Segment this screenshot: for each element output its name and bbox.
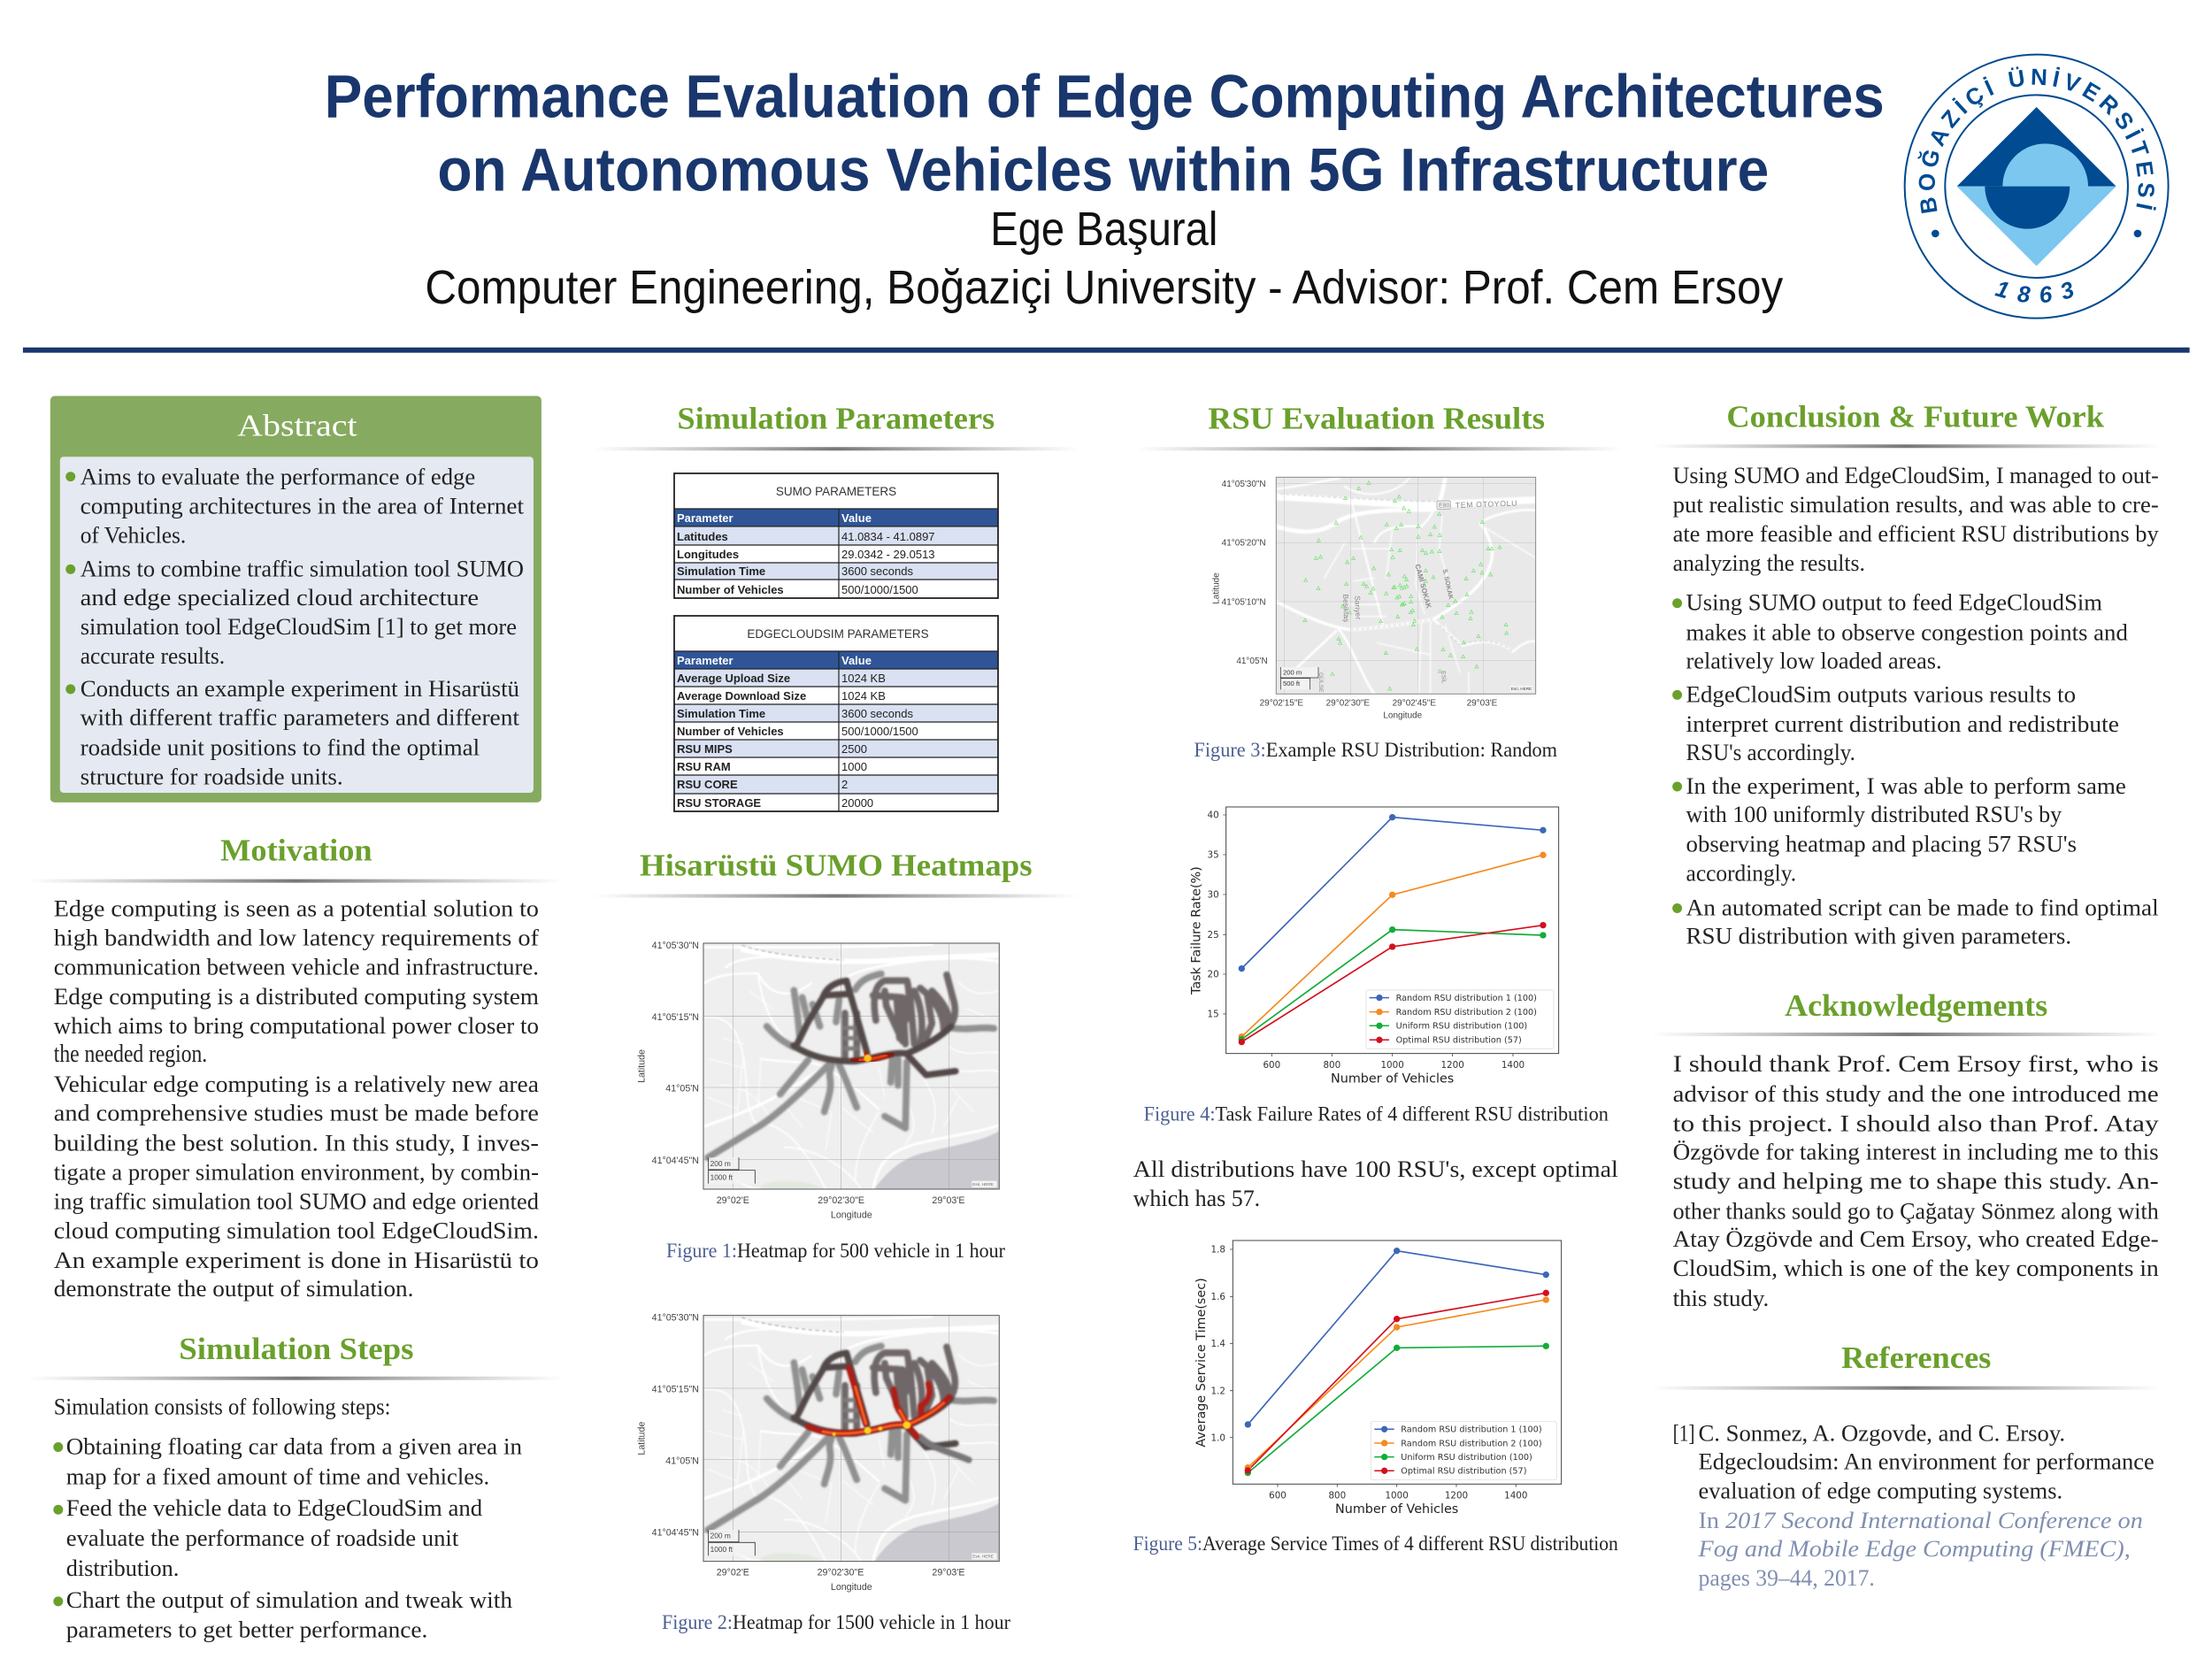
chart: heatmap 500 vehicles: Longitude — [831, 1210, 872, 1220]
motivation text: high bandwidth and low latency requirements of — [54, 924, 539, 950]
chart: task failure rate: Uniform RSU distribution (100) — [1396, 1022, 1527, 1032]
chart: rsu distribution map: 29°02'45"E — [1393, 698, 1436, 708]
chart: rsu distribution map: 5. SOKAK — [1441, 569, 1455, 601]
abstract bullets: of Vehicles. — [81, 521, 186, 548]
table: sumo parameters: 3600 seconds — [841, 565, 913, 578]
conclusion text: analyzing the results. — [1673, 549, 1865, 576]
reference entry: Edgecloudsim: An environment for performance — [1699, 1448, 2154, 1474]
chart: rsu distribution map: 29°03'E — [1467, 698, 1498, 708]
heading: heatmaps: Hisarüstü SUMO Heatmaps — [640, 849, 1033, 883]
table: sumo parameters: Number of Vehicles — [677, 583, 784, 596]
table: edgecloudsim parameters: 2 — [841, 778, 848, 791]
table: edgecloudsim parameters: Number of Vehicles — [677, 725, 784, 738]
conclusion bullets: accordingly. — [1686, 860, 1796, 887]
chart: heatmap 1500 vehicles — [637, 1313, 999, 1593]
chart: average service time: 1.4 — [1211, 1339, 1225, 1349]
chart: heatmap 500 vehicles: Latitude — [637, 1049, 648, 1083]
icon: university logo: BOĞAZİÇİ ÜNİVERSİTESİ — [1917, 66, 2156, 214]
motivation text: communication between vehicle and infrastructure. — [54, 953, 539, 979]
table: edgecloudsim parameters: 1000 — [841, 760, 867, 773]
panel: conclusion and future work — [1651, 399, 2162, 949]
conclusion bullets: Using SUMO output to feed EdgeCloudSim — [1686, 589, 2102, 616]
chart: rsu distribution map: Latitude — [1211, 572, 1221, 604]
table: sumo parameters: Value — [841, 511, 872, 525]
chart: average service time: Random RSU distribution 2 (100) — [1401, 1439, 1542, 1448]
chart: task failure rate: 1200 — [1440, 1060, 1464, 1071]
chart: rsu distribution map: TEM OTOYOLU — [1455, 499, 1517, 510]
acknowledgements text: other thanks sould go to Çağatay Sönmez along with — [1673, 1197, 2159, 1224]
panel: motivation — [27, 833, 565, 1302]
conclusion text: put realistic simulation results, and was able to cre- — [1673, 491, 2159, 518]
chart: task failure rate: 20 — [1208, 970, 1219, 980]
motivation text: demonstrate the output of simulation. — [54, 1275, 413, 1302]
conclusion bullets: interpret current distribution and redistribute — [1686, 710, 2119, 737]
chart: task failure rate: 40 — [1208, 810, 1219, 821]
simulation steps text: Chart the output of simulation and tweak with — [66, 1586, 513, 1613]
chart: average service time: Random RSU distribution 1 (100) — [1401, 1425, 1542, 1435]
chart: task failure rate: 15 — [1208, 1010, 1219, 1020]
chart: rsu distribution map: CAMİ SOKAK — [1413, 564, 1432, 610]
chart: heatmap 1500 vehicles: 41°05'30"N — [652, 1313, 699, 1324]
chart: average service time — [1194, 1240, 1562, 1517]
abstract bullets: accurate results. — [81, 642, 225, 669]
motivation text: ing traffic simulation tool SUMO and edge oriented — [54, 1187, 539, 1214]
heading: references: References — [1841, 1340, 1991, 1375]
chart: rsu distribution map — [1211, 477, 1536, 720]
table: edgecloudsim parameters: RSU RAM — [677, 760, 731, 773]
conclusion bullets: with 100 uniformly distributed RSU's by — [1686, 801, 2062, 827]
motivation text: tigate a proper simulation environment, by combin- — [54, 1158, 539, 1185]
acknowledgements text: study and helping me to shape this study. An- — [1673, 1167, 2159, 1194]
chart: average service time: Number of Vehicles — [1335, 1502, 1458, 1517]
caption: figure 2: Figure 2:Heatmap for 1500 vehicle in 1 hour — [662, 1611, 1010, 1633]
title: Performance Evaluation of Edge Computing Architectures — [325, 63, 1885, 131]
abstract bullets: computing architectures in the area of Internet — [81, 493, 525, 519]
chart: task failure rate: 30 — [1208, 890, 1219, 901]
simulation steps text: parameters to get better performance. — [66, 1617, 427, 1643]
chart: task failure rate: Optimal RSU distribution (57) — [1396, 1036, 1522, 1046]
conclusion bullets: makes it able to observe congestion points and — [1686, 619, 2128, 646]
reference entry: C. Sonmez, A. Ozgovde, and C. Ersoy. — [1699, 1419, 2065, 1446]
chart: heatmap 1500 vehicles: 1000 ft — [710, 1545, 733, 1554]
chart: heatmap 1500 vehicles: 29°03'E — [932, 1568, 965, 1578]
chart: task failure rate: 1400 — [1502, 1060, 1525, 1071]
table: sumo parameters: Simulation Time — [677, 565, 765, 578]
chart: average service time: Average Service Time(sec) — [1194, 1278, 1209, 1448]
table: sumo parameters: Longitudes — [677, 548, 739, 561]
caption: figure 1: Figure 1:Heatmap for 500 vehicle in 1 hour — [666, 1240, 1005, 1262]
motivation text: Vehicular edge computing is a relatively new area — [54, 1071, 539, 1097]
acknowledgements text: Özgövde for taking interest in including me to this — [1673, 1139, 2159, 1165]
abstract bullets: simulation tool EdgeCloudSim [1] to get more — [81, 613, 517, 640]
conclusion text: Using SUMO and EdgeCloudSim, I managed to out- — [1673, 462, 2159, 488]
chart: rsu distribution map: 41°05'30"N — [1222, 480, 1266, 489]
heading: motivation: Motivation — [220, 833, 373, 868]
chart: heatmap 500 vehicles: 29°02'E — [717, 1195, 749, 1206]
caption: figure 5: Figure 5:Average Service Times of 4 different RSU distribution — [1133, 1532, 1618, 1555]
chart: heatmap 500 vehicles: 1000 ft — [710, 1172, 733, 1181]
chart: heatmap 1500 vehicles: 41°05'15"N — [652, 1385, 699, 1395]
motivation text: An example experiment is done in Hisarüstü to — [54, 1247, 539, 1273]
reference entry — [1673, 1419, 2154, 1591]
abstract bullets: roadside unit positions to find the optimal — [81, 734, 480, 761]
abstract bullets: Aims to combine traffic simulation tool SUMO — [81, 555, 524, 581]
chart: rsu distribution map: Longitude — [1383, 710, 1423, 720]
panel: simulation parameters — [593, 401, 1079, 811]
table: sumo parameters: SUMO PARAMETERS — [776, 485, 896, 498]
chart: heatmap 1500 vehicles: Longitude — [831, 1582, 872, 1593]
chart: heatmap 1500 vehicles: 29°02'30"E — [818, 1568, 864, 1578]
chart: heatmap 500 vehicles: 41°05'N — [665, 1084, 699, 1094]
motivation text: Edge computing is seen as a potential solution to — [54, 895, 539, 921]
table: edgecloudsim parameters: 1024 KB — [841, 672, 886, 685]
heading: simulation parameters: Simulation Parameters — [677, 401, 995, 435]
panel: abstract — [50, 396, 541, 803]
header rule — [23, 348, 2190, 353]
acknowledgements text — [1673, 1050, 2159, 1311]
chart: average service time: 1.2 — [1211, 1386, 1225, 1396]
title — [325, 63, 1885, 204]
caption: figure 3: Figure 3:Example RSU Distribution: Random — [1194, 739, 1557, 761]
panel: rsu evaluation results — [1133, 401, 1623, 1555]
heading: acknowledgements: Acknowledgements — [1785, 988, 2047, 1023]
chart: heatmap 500 vehicles: Esri, HERE — [972, 1182, 994, 1187]
heading: rsu evaluation results: RSU Evaluation Results — [1208, 401, 1545, 435]
chart: heatmap 1500 vehicles: 41°05'N — [665, 1455, 699, 1466]
chart: average service time: 800 — [1328, 1490, 1346, 1501]
conclusion bullets — [1672, 589, 2159, 949]
conclusion text — [1673, 462, 2159, 576]
acknowledgements text: I should thank Prof. Cem Ersoy first, who is — [1673, 1050, 2159, 1077]
heading: conclusion: Conclusion & Future Work — [1726, 399, 2105, 434]
table: edgecloudsim parameters: Parameter — [677, 654, 733, 667]
chart: heatmap 500 vehicles: 29°02'30"E — [818, 1195, 864, 1206]
table: sumo parameters — [674, 473, 998, 598]
motivation text: cloud computing simulation tool EdgeCloudSim. — [54, 1217, 539, 1243]
chart: rsu distribution map: E80 — [1439, 503, 1450, 509]
simulation steps text: Simulation consists of following steps: — [54, 1394, 391, 1420]
table: edgecloudsim parameters: Simulation Time — [677, 707, 765, 720]
chart: average service time: 1.8 — [1211, 1245, 1225, 1256]
conclusion bullets: observing heatmap and placing 57 RSU's — [1686, 831, 2077, 857]
table: edgecloudsim parameters: RSU MIPS — [677, 742, 733, 756]
reference entry: pages 39–44, 2017. — [1699, 1564, 1875, 1591]
chart: task failure rate: 800 — [1323, 1060, 1340, 1071]
chart: task failure rate: Random RSU distribution 2 (100) — [1396, 1008, 1537, 1018]
abstract bullets: with different traffic parameters and different — [81, 704, 520, 731]
chart: task failure rate: 35 — [1208, 850, 1219, 861]
reference entry: Fog and Mobile Edge Computing (FMEC), — [1697, 1535, 2131, 1562]
panel: heatmaps — [593, 849, 1079, 1633]
table: sumo parameters: Parameter — [677, 511, 733, 525]
table: edgecloudsim parameters: 20000 — [841, 796, 873, 810]
chart: average service time: 600 — [1269, 1490, 1286, 1501]
chart: task failure rate: 25 — [1208, 930, 1219, 941]
motivation text: building the best solution. In this study, I inves- — [54, 1130, 539, 1156]
note: distributions: All distributions have 100 RSU's, except optimal — [1133, 1156, 1618, 1182]
panel: simulation steps — [27, 1332, 565, 1643]
conclusion bullets: RSU's accordingly. — [1686, 739, 1855, 765]
table: edgecloudsim parameters: RSU STORAGE — [677, 796, 761, 810]
heading: simulation steps: Simulation Steps — [179, 1332, 413, 1366]
abstract bullets — [65, 464, 525, 790]
acknowledgements text: Atay Özgövde and Cem Ersoy, who created Edge- — [1673, 1225, 2159, 1252]
chart: heatmap 1500 vehicles: Esri, HERE — [972, 1555, 994, 1559]
chart: rsu distribution map: GÜLSE — [1317, 672, 1325, 693]
author: Ege Başural — [990, 203, 1217, 256]
note: distributions: which has 57. — [1133, 1185, 1260, 1211]
motivation text: and comprehensive studies must be made before — [54, 1100, 539, 1126]
table: edgecloudsim parameters: 2500 — [841, 742, 867, 756]
conclusion bullets: RSU distribution with given parameters. — [1686, 922, 2071, 949]
acknowledgements text: CloudSim, which is one of the key components in — [1673, 1255, 2159, 1281]
panel: acknowledgements — [1651, 988, 2162, 1311]
chart: rsu distribution map: 41°05'20"N — [1222, 539, 1266, 549]
chart: task failure rate: Task Failure Rate(%) — [1190, 866, 1204, 995]
chart: heatmap 1500 vehicles: 29°02'E — [717, 1568, 749, 1578]
chart: rsu distribution map: 41°05'10"N — [1222, 597, 1266, 607]
table: edgecloudsim parameters: EDGECLOUDSIM PARAMETERS — [747, 627, 929, 641]
table: edgecloudsim parameters: RSU CORE — [677, 778, 738, 791]
table: sumo parameters: Latitudes — [677, 530, 728, 543]
abstract bullets: Aims to evaluate the performance of edge — [81, 464, 475, 490]
chart: heatmap 500 vehicles: 200 m — [710, 1159, 731, 1168]
chart: average service time: 1.0 — [1211, 1432, 1225, 1443]
chart: average service time: 1400 — [1504, 1490, 1527, 1501]
chart: heatmap 500 vehicles — [637, 941, 999, 1220]
conclusion bullets: An automated script can be made to find optimal — [1686, 895, 2159, 921]
chart: task failure rate: Random RSU distribution 1 (100) — [1396, 994, 1537, 1003]
chart: rsu distribution map: ESİL — [1440, 671, 1448, 684]
chart: rsu distribution map: Sarıyer — [1353, 595, 1363, 619]
title: on Autonomous Vehicles within 5G Infrastructure — [437, 135, 1769, 204]
table: sumo parameters: 500/1000/1500 — [841, 583, 918, 596]
caption: figure 4: Figure 4:Task Failure Rates of 4 different RSU distribution — [1144, 1103, 1609, 1125]
icon: university logo — [1904, 53, 2170, 319]
chart: heatmap 1500 vehicles: Latitude — [637, 1422, 648, 1455]
table: edgecloudsim parameters: 3600 seconds — [841, 707, 913, 720]
simulation steps text — [53, 1394, 523, 1643]
chart: rsu distribution map: Esri, HERE — [1511, 687, 1532, 691]
simulation steps text: Feed the vehicle data to EdgeCloudSim and — [66, 1494, 483, 1521]
reference entry: evaluation of edge computing systems. — [1699, 1477, 2062, 1503]
abstract bullets: Conducts an example experiment in Hisarüstü — [81, 675, 519, 702]
table: edgecloudsim parameters: 1024 KB — [841, 689, 886, 703]
acknowledgements text: this study. — [1673, 1285, 1769, 1311]
chart: heatmap 500 vehicles: 41°05'15"N — [652, 1012, 699, 1023]
motivation text: Edge computing is a distributed computing system — [54, 983, 539, 1010]
icon: university logo: 1863 — [1994, 281, 2074, 303]
reference entry: In 2017 Second International Conference on — [1699, 1507, 2143, 1533]
panel: references — [1651, 1340, 2162, 1591]
table: edgecloudsim parameters: 500/1000/1500 — [841, 725, 918, 738]
chart: average service time: 1000 — [1385, 1490, 1409, 1501]
chart: average service time: 1.6 — [1211, 1292, 1225, 1302]
chart: rsu distribution map: 41°05'N — [1236, 657, 1268, 666]
simulation steps text: distribution. — [66, 1555, 179, 1581]
table: sumo parameters: 41.0834 - 41.0897 — [841, 530, 935, 543]
motivation text: which aims to bring computational power closer to — [54, 1012, 539, 1039]
chart: task failure rate: Number of Vehicles — [1331, 1071, 1454, 1086]
table: edgecloudsim parameters: Value — [841, 654, 872, 667]
chart: heatmap 500 vehicles: 41°04'45"N — [652, 1156, 699, 1166]
conclusion text: ate more feasible and efficient RSU distributions by — [1673, 520, 2159, 547]
chart: rsu distribution map: 500 ft — [1283, 680, 1301, 687]
conclusion bullets: EdgeCloudSim outputs various results to — [1686, 680, 2076, 707]
acknowledgements text: to this project. I should also than Prof. Atay — [1673, 1110, 2159, 1137]
chart: average service time: 1200 — [1445, 1490, 1468, 1501]
simulation steps text: evaluate the performance of roadside unit — [66, 1525, 459, 1551]
table: sumo parameters: 29.0342 - 29.0513 — [841, 548, 935, 561]
table: edgecloudsim parameters: Average Download Size — [677, 689, 806, 703]
chart: task failure rate: 1000 — [1380, 1060, 1404, 1071]
chart: average service time: Optimal RSU distribution (57) — [1401, 1467, 1526, 1477]
reference entry: [1] — [1673, 1419, 1695, 1446]
chart: heatmap 500 vehicles: 41°05'30"N — [652, 941, 699, 951]
chart: rsu distribution map: 200 m — [1283, 669, 1302, 677]
simulation steps text: Obtaining floating car data from a given area in — [66, 1432, 523, 1459]
acknowledgements text: advisor of this study and the one introduced me — [1673, 1080, 2159, 1107]
chart: rsu distribution map: 29°02'15"E — [1260, 698, 1303, 708]
table: edgecloudsim parameters: Average Upload Size — [677, 672, 790, 685]
abstract bullets: and edge specialized cloud architecture — [81, 584, 479, 611]
chart: rsu distribution map: 29°02'30"E — [1326, 698, 1370, 708]
abstract heading: Abstract — [237, 408, 357, 442]
motivation text — [54, 895, 539, 1302]
conclusion bullets: In the experiment, I was able to perform same — [1686, 772, 2126, 799]
chart: rsu distribution map: Beşiktaş — [1341, 594, 1351, 622]
chart: heatmap 1500 vehicles: 41°04'45"N — [652, 1528, 699, 1539]
affiliation: Computer Engineering, Boğaziçi University - Advisor: Prof. Cem Ersoy — [425, 261, 1783, 314]
motivation text: the needed region. — [54, 1041, 207, 1068]
chart: task failure rate: 600 — [1263, 1060, 1280, 1071]
chart: task failure rate — [1190, 807, 1559, 1086]
note: distributions — [1133, 1156, 1618, 1211]
chart: heatmap 500 vehicles: 29°03'E — [932, 1195, 965, 1206]
simulation steps text: map for a fixed amount of time and vehicles. — [66, 1463, 489, 1489]
abstract bullets: structure for roadside units. — [81, 764, 343, 790]
conclusion bullets: relatively low loaded areas. — [1686, 647, 1942, 673]
chart: average service time: Uniform RSU distribution (100) — [1401, 1453, 1532, 1463]
chart: heatmap 1500 vehicles: 200 m — [710, 1532, 731, 1540]
table: edgecloudsim parameters — [674, 616, 998, 811]
